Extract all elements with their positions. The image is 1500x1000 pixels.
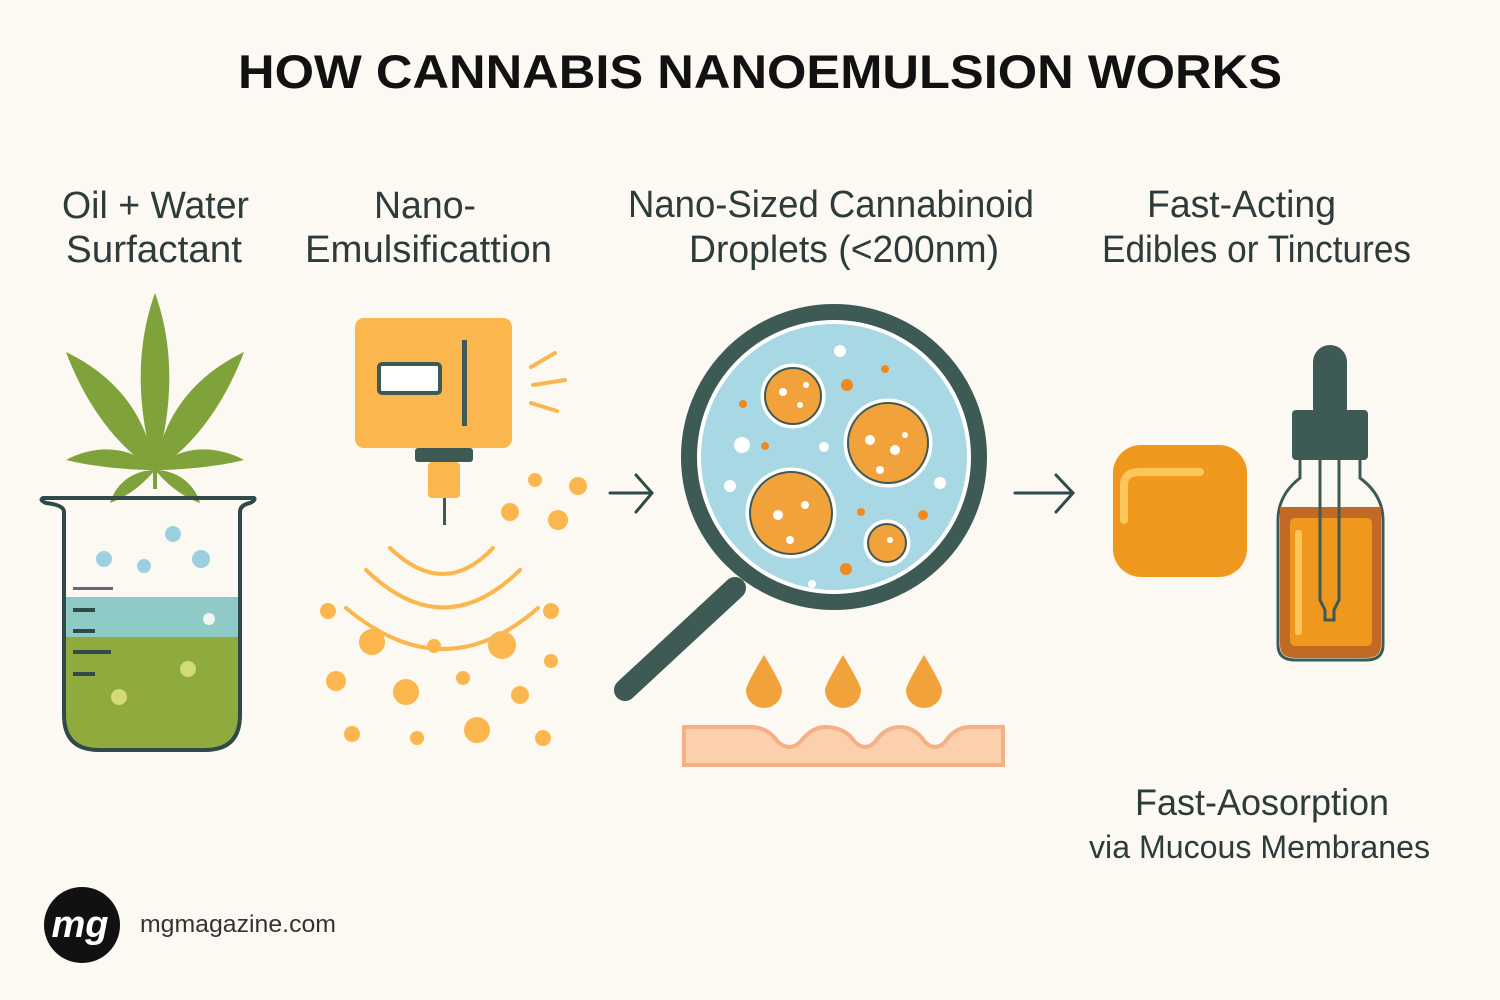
droplets: spray (320, 473, 587, 746)
label: step 3: Droplets (<200nm) (689, 229, 999, 271)
icon: oil drops (746, 655, 942, 708)
label: step 1: Oil + Water (62, 185, 249, 227)
icon: magnifier with droplets (625, 312, 979, 690)
arrow 1 (610, 475, 652, 512)
icon: ultrasonic device (346, 318, 565, 649)
icon: cannabis leaf (66, 293, 244, 503)
label: step 1: Surfactant (66, 229, 242, 271)
label: absorption: via Mucous Membranes (1089, 829, 1430, 865)
logo: mg (52, 904, 108, 946)
icon: mucous membrane (684, 727, 1003, 765)
website url: mgmagazine.com (140, 911, 336, 938)
icon: gummy (1113, 445, 1247, 577)
label: step 3: Nano-Sized Cannabinoid (628, 184, 1034, 226)
label: step 2: Nano- (374, 185, 476, 227)
icon: tincture bottle (1278, 345, 1383, 660)
label: step 4: Fast-Acting (1147, 184, 1336, 226)
label: absorption: Fast-Aosorption (1135, 782, 1389, 823)
logo (44, 887, 120, 963)
label: absorption (1089, 782, 1430, 865)
arrow 2 (1015, 475, 1073, 512)
label: step 2 (305, 185, 552, 271)
title: HOW CANNABIS NANOEMULSION WORKS (238, 45, 1282, 98)
label: step 4 (1102, 184, 1411, 271)
label: step 3 (628, 184, 1034, 271)
icon: beaker (42, 498, 254, 750)
label: step 2: Emulsificattion (305, 229, 552, 271)
label: step 4: Edibles or Tinctures (1102, 229, 1411, 271)
label: step 1 (62, 185, 249, 271)
